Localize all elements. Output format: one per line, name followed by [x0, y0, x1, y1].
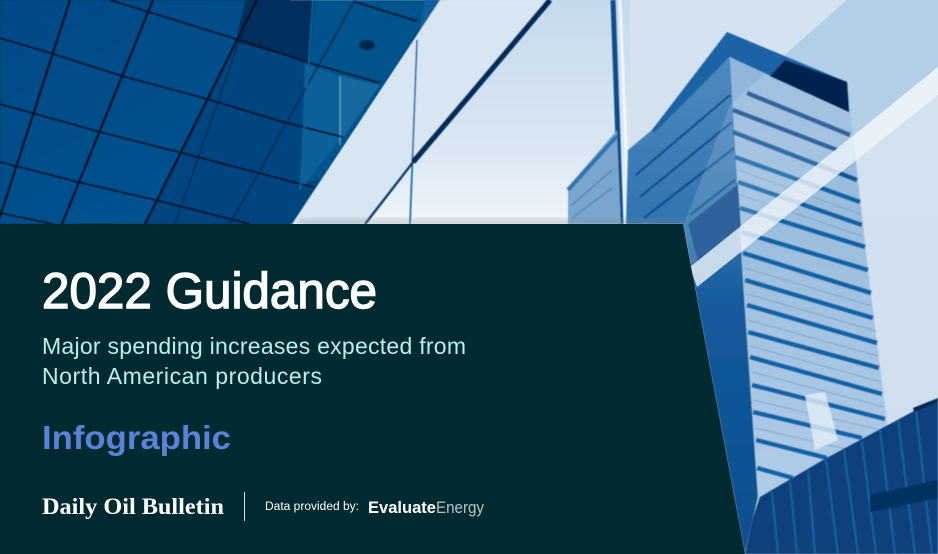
back tower	[568, 130, 621, 224]
subtitle	[42, 333, 466, 389]
right face	[730, 57, 900, 554]
title: 2022 Guidance	[42, 263, 377, 319]
logo: Evaluate Energy: Evaluate	[368, 498, 436, 517]
glass facade tiles	[0, 0, 440, 224]
subtitle: Major spending increases expected from	[42, 333, 466, 359]
logo: Daily Oil Bulletin: Daily Oil Bulletin	[42, 494, 224, 520]
logo: Evaluate Energy	[368, 498, 484, 517]
tower in reflection	[568, 57, 900, 554]
shadow above panel	[300, 219, 685, 225]
data credit: Data provided by:	[265, 501, 359, 513]
sky tinted band	[700, 0, 938, 180]
left face bands	[636, 95, 735, 218]
logo: Evaluate Energy: Energy	[436, 498, 484, 517]
right face bands	[733, 93, 885, 478]
dark foliage reflection	[688, 184, 741, 262]
white reflection stripe	[690, 67, 938, 287]
tower roof	[652, 32, 849, 133]
left face	[626, 57, 758, 554]
sun glint	[805, 392, 838, 450]
dark title panel	[0, 224, 745, 554]
low foreground building	[745, 398, 938, 554]
right face thin window lines	[738, 170, 884, 450]
subtitle: North American producers	[42, 363, 322, 389]
infographic label: Infographic	[42, 419, 231, 456]
translucent reflection veil on tower	[684, 0, 938, 267]
divider	[244, 492, 245, 521]
sky reflection	[290, 0, 938, 300]
light glass panes	[292, 0, 629, 224]
